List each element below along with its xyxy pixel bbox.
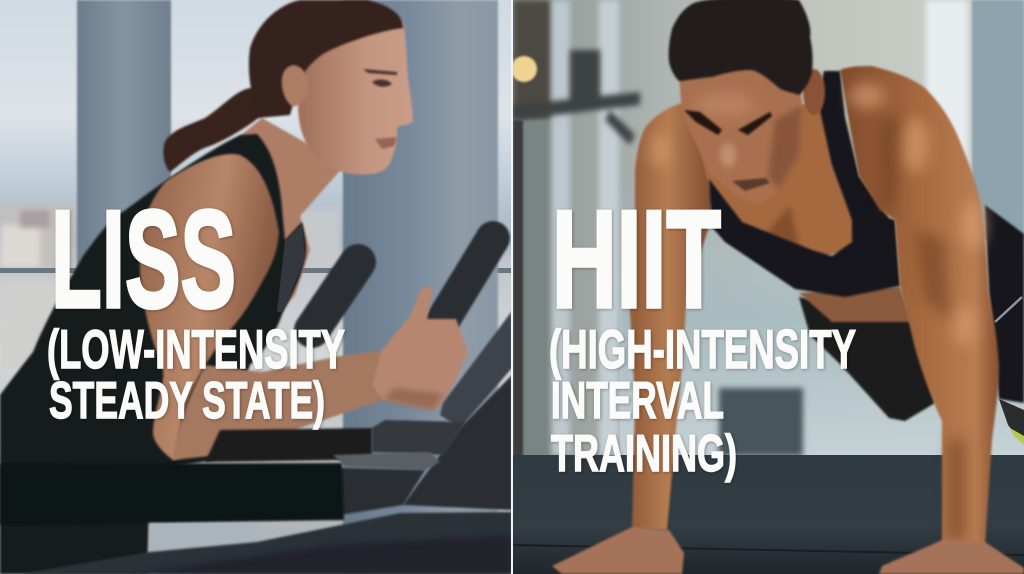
panel divider — [511, 0, 513, 574]
man: shorts right of arm — [985, 205, 1024, 403]
heading: HIIT: HIIT — [552, 182, 721, 337]
man: black tank top — [709, 71, 900, 297]
man: neck and chest — [700, 90, 860, 262]
woman: neck and chest — [240, 118, 345, 310]
window strip — [926, 0, 968, 200]
gym background — [513, 0, 1024, 460]
man: arm highlights — [650, 83, 986, 347]
dark rack strip — [513, 0, 551, 120]
pale columns — [552, 0, 619, 455]
woman: hair — [249, 0, 403, 118]
lower left pillar — [522, 118, 552, 455]
treadmill tray body — [340, 468, 425, 515]
column: right — [343, 0, 498, 574]
woman: ear — [282, 65, 308, 106]
treadmill handle: rear — [312, 262, 358, 330]
man: hair — [669, 0, 813, 95]
man: right shoulder and arm — [840, 66, 999, 545]
subheading: high-intensity interval training: (HIGH-INTENSITY — [549, 318, 856, 380]
woman: black tank top and torso — [0, 134, 306, 574]
woman: hand on handle — [372, 287, 468, 410]
subheading: high-intensity interval training: TRAINING) — [551, 425, 737, 483]
window pillar: right — [972, 0, 1024, 240]
background equipment — [719, 388, 803, 456]
woman: lips — [375, 137, 397, 149]
panel: LISS photo — [0, 0, 512, 574]
treadmill crossbar — [205, 428, 372, 462]
man: forehead light — [695, 93, 755, 117]
treadmill gap — [149, 522, 256, 532]
man: right hand — [879, 540, 1024, 574]
man: left arm and shoulder — [629, 103, 715, 530]
man: ear — [803, 69, 825, 115]
subheading: low-intensity steady state: (LOW-INTENSITY — [47, 318, 345, 380]
man: left hand — [552, 527, 684, 574]
man: cheek shadow — [768, 105, 802, 190]
wall lamp — [511, 56, 537, 82]
lower wall tint — [620, 258, 1024, 455]
subheading: low-intensity steady state — [47, 318, 345, 430]
woman: hand shadow — [383, 388, 443, 410]
man: shorts — [799, 297, 935, 421]
rack crossbars — [513, 50, 640, 145]
man: brows and eyes — [684, 110, 772, 135]
man: nose highlight — [720, 143, 736, 167]
window rail — [0, 268, 512, 273]
subheading: high-intensity interval training: INTERVAL — [551, 372, 724, 430]
floor seams — [513, 545, 1024, 555]
man: arm shadows — [880, 115, 965, 540]
console: main body — [403, 375, 512, 510]
woman: brow, eye — [363, 69, 397, 87]
woman: face — [298, 19, 413, 174]
panel: HIIT photo — [511, 0, 1024, 574]
treadmill deck — [20, 512, 512, 574]
column: left — [76, 0, 172, 268]
treadmill main rail — [0, 463, 344, 525]
floor — [513, 455, 1024, 574]
man: pectoral shadow — [765, 205, 800, 252]
subheading: low-intensity steady state: STEADY STATE) — [49, 372, 325, 430]
subheading: high-intensity interval training — [549, 318, 856, 483]
man: far leg and shoe — [999, 399, 1024, 445]
treadmill deck inner — [130, 535, 512, 574]
woman: strap highlight — [277, 225, 305, 312]
console: upper screen — [440, 311, 512, 428]
woman: shoulder and upper arm — [140, 154, 279, 460]
distant city skyline — [0, 205, 340, 370]
man: abdomen — [799, 287, 912, 322]
shorts highlight — [995, 297, 1022, 322]
man: face — [679, 65, 803, 205]
treadmill cupholder — [372, 420, 465, 455]
woman: ponytail — [163, 88, 262, 172]
treadmill tray — [333, 452, 440, 470]
man: mouth and stubble — [732, 178, 770, 191]
heading: LISS: LISS — [51, 182, 236, 337]
woman: forearm — [173, 350, 388, 460]
treadmill handle: front — [437, 238, 493, 330]
window background — [0, 0, 511, 574]
